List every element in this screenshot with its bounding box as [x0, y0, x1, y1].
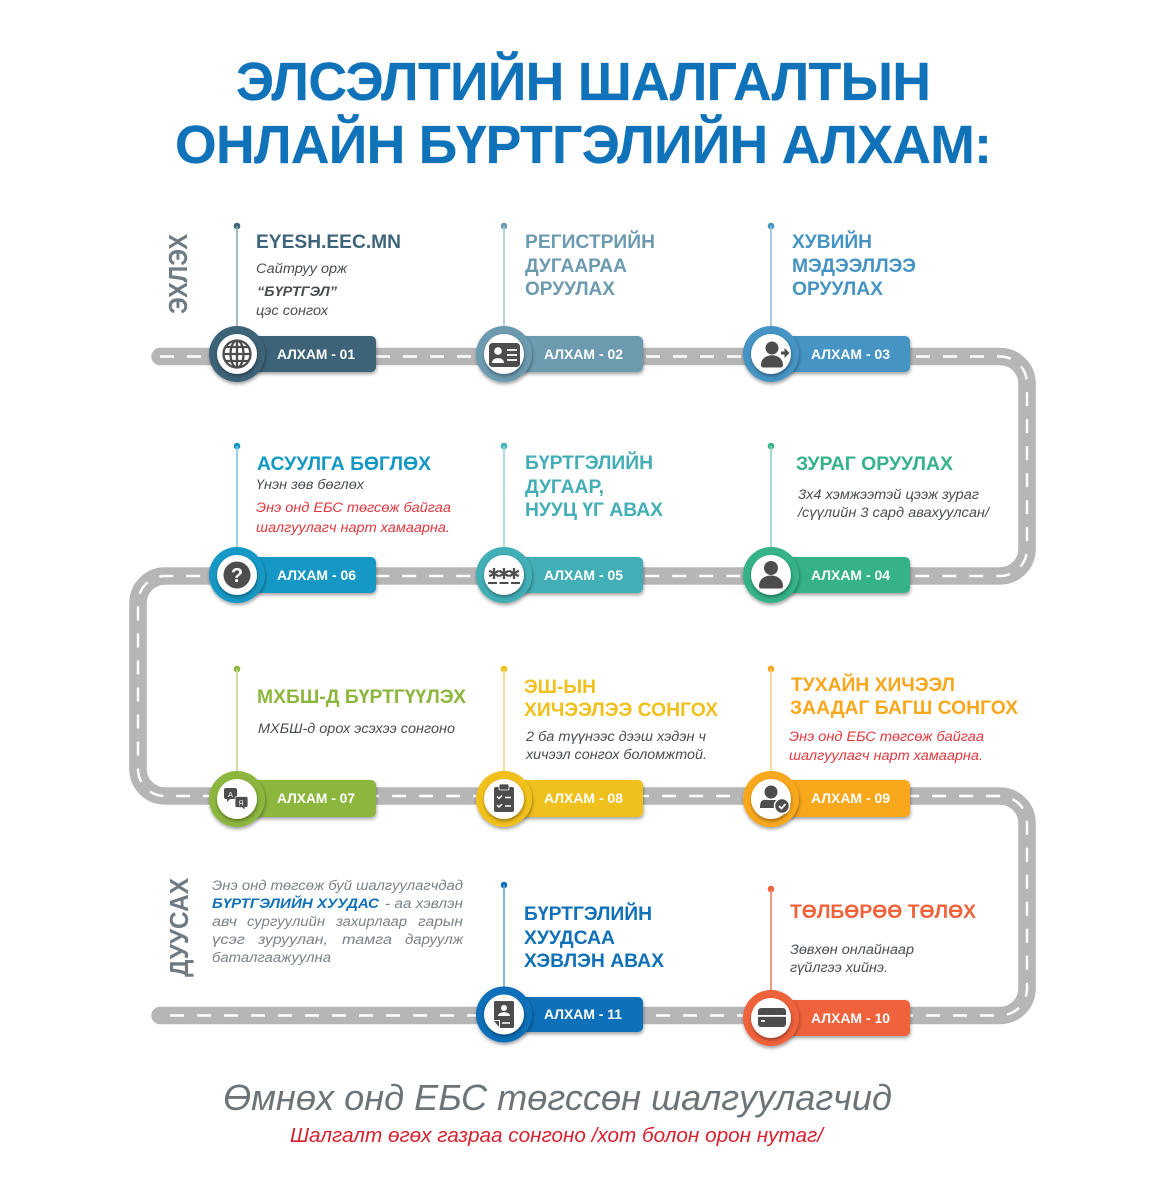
step 05: БҮРТГЭЛИЙН [525, 450, 653, 474]
step 07: МХБШ-д орох эсэхээ сонгоно [258, 721, 456, 736]
step 08: ХИЧЭЭЛЭЭ СОНГОХ [524, 699, 718, 721]
step 05: АЛХАМ - 05 [544, 568, 624, 583]
step 10 [743, 886, 976, 1046]
footer note [223, 1077, 892, 1147]
finish note text block: захирлаар [335, 914, 408, 929]
step 03 [743, 223, 916, 382]
step 04: 3x4 хэмжээтэй цээж зураг [798, 487, 979, 502]
step 09: шалгуулагч нарт хамаарна. [789, 748, 983, 763]
step 06: шалгуулагч нарт хамаарна. [256, 520, 450, 535]
finish note text block: зуруулан, [257, 932, 328, 947]
step 08: АЛХАМ - 08 [544, 791, 624, 806]
step 10: гүйлгээ хийнэ. [790, 960, 888, 975]
finish note text block: тамга [342, 932, 393, 947]
icon: clipboard checklist [494, 784, 514, 812]
step 08: хичээл сонгох боломжтой. [525, 747, 707, 762]
step 01 [209, 223, 401, 382]
step 05 [476, 443, 663, 603]
icon: user with arrow [761, 342, 790, 368]
step 05: ДУГААР, [525, 476, 604, 498]
step 09 [743, 666, 1018, 827]
step 05: НУУЦ ҮГ АВАХ [525, 499, 663, 521]
icon: translation bubbles: А [228, 790, 233, 799]
step 03: АЛХАМ - 03 [811, 347, 891, 362]
step 03: ХУВИЙН [792, 229, 872, 253]
step 02 [476, 223, 655, 382]
finish note text block [212, 878, 464, 965]
step 02: АЛХАМ - 02 [544, 347, 623, 362]
step 06: Энэ онд ЕБС төгсөж байгаа [256, 500, 452, 515]
finish note text block: баталгаажуулна [212, 950, 332, 965]
finish note text block: үсэг [212, 932, 245, 947]
title [175, 51, 992, 175]
label: finish: ДУУСАХ [164, 877, 194, 977]
step 04 [743, 443, 990, 603]
icon: credit card [758, 1008, 786, 1027]
step 06: АЛХАМ - 06 [277, 568, 357, 583]
footer note: Өмнөх онд ЕБС төгссөн шалгуулагчид [223, 1077, 892, 1118]
step 09: Энэ онд ЕБС төгсөж байгаа [789, 729, 985, 744]
step 04: ЗУРАГ ОРУУЛАХ [796, 453, 953, 475]
icon: translation bubbles [224, 788, 248, 810]
finish note text block: авч [212, 914, 237, 929]
footer note: Шалгалт өгөх газраа сонгоно /хот болон орон нутаг/ [290, 1125, 826, 1147]
step 07 [209, 666, 466, 827]
step 02: РЕГИСТРИЙН [525, 229, 655, 253]
step 03: ОРУУЛАХ [792, 278, 883, 300]
step 10: АЛХАМ - 10 [811, 1011, 890, 1026]
step 08 [476, 666, 718, 827]
step 10: Зөвхөн онлайнаар [790, 942, 915, 957]
step 09: ЗААДАГ БАГШ СОНГОХ [790, 697, 1018, 719]
icon: id card [489, 343, 520, 367]
step 08: ЭШ-ЫН [524, 676, 596, 698]
step 06: Үнэн зөв бөглөх [256, 477, 365, 492]
step 11: БҮРТГЭЛИЙН [524, 901, 652, 925]
step 01: цэс сонгох [256, 303, 329, 318]
finish note text block: гарын [418, 914, 464, 929]
icon: translation bubbles: Я [238, 798, 244, 808]
finish note text block: Энэ онд төгсөж буй шалгуулагчдад [212, 878, 464, 893]
step 11: АЛХАМ - 11 [544, 1007, 623, 1022]
icon: user with check [760, 786, 790, 814]
label: start: ЭХЛЭХ [163, 233, 193, 314]
step 03: МЭДЭЭЛЛЭЭ [792, 255, 916, 277]
step 06 [209, 443, 452, 603]
step 11: ХУУДСАА [524, 927, 615, 949]
finish note text block: - аа хэвлэн [385, 896, 464, 911]
icon: password [488, 568, 520, 583]
step 02: ОРУУЛАХ [525, 278, 615, 300]
finish note text block: БҮРТГЭЛИЙН ХУУДАС [212, 895, 379, 911]
step 09: ТУХАЙН ХИЧЭЭЛ [791, 672, 955, 696]
step 01: Сайтруу орж [256, 261, 348, 276]
step 01: EYESH.EEC.MN [256, 231, 401, 253]
step 04: /сүүлийн 3 сард авахуулсан/ [797, 505, 990, 520]
step 02: ДУГААРАА [525, 255, 627, 277]
step 10: ТӨЛБӨРӨӨ ТӨЛӨХ [790, 901, 976, 923]
icon: globe [224, 340, 250, 368]
step 08: 2 ба түүнээс дээш хэдэн ч [525, 729, 706, 744]
icon: printed document [494, 1001, 514, 1028]
step 01: “БҮРТГЭЛ” [257, 284, 337, 299]
step 01: АЛХАМ - 01 [277, 347, 355, 362]
road [138, 356, 1027, 1016]
icon: question mark: ? [231, 565, 243, 587]
step 06: АСУУЛГА БӨГЛӨХ [257, 453, 431, 475]
icon: question mark [224, 562, 250, 588]
icon: user [759, 561, 783, 588]
step 09: АЛХАМ - 09 [811, 791, 890, 806]
step 11 [476, 882, 664, 1042]
title: ЭЛСЭЛТИЙН ШАЛГАЛТЫН [236, 51, 931, 112]
step 11: ХЭВЛЭН АВАХ [524, 950, 664, 972]
step 07: МХБШ-Д БҮРТГҮҮЛЭХ [257, 686, 466, 708]
finish note text block: сургуулийн [247, 914, 326, 929]
step 07: АЛХАМ - 07 [277, 791, 355, 806]
step 04: АЛХАМ - 04 [811, 568, 891, 583]
finish note text block: даруулж [405, 932, 464, 947]
title: ОНЛАЙН БҮРТГЭЛИЙН АЛХАМ: [175, 114, 992, 175]
